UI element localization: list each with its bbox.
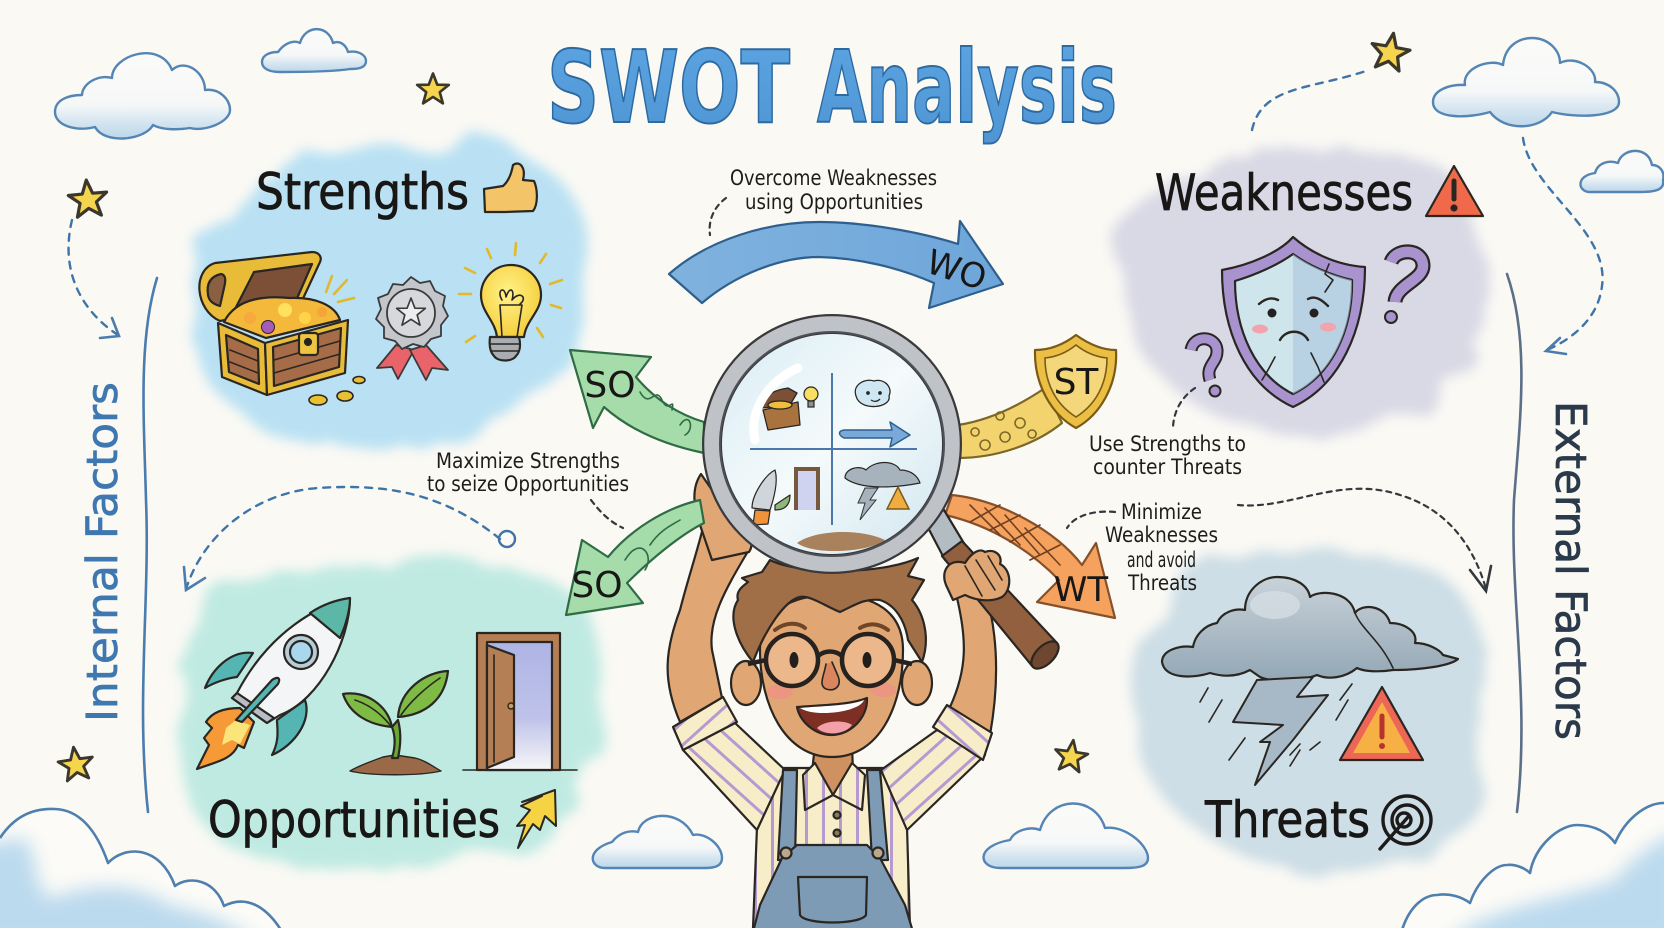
side label: internal factors: Internal Factors (78, 382, 128, 722)
cheeks (767, 683, 896, 699)
right hand gripping handle (944, 550, 1009, 600)
callout: SO: Maximize Strengths (436, 449, 620, 473)
callout: ST: Use Strengths to (1089, 432, 1246, 456)
arrow: SO lower (566, 500, 704, 615)
icon: open door (463, 633, 577, 770)
icon: storm cloud (1162, 577, 1458, 681)
icon: medal (376, 277, 448, 380)
ears (731, 661, 932, 705)
mouth (797, 698, 867, 735)
corner cloud: bottom right (1402, 803, 1664, 928)
left arm (668, 500, 747, 722)
mini icon: storm cloud (845, 462, 920, 487)
wash: strengths (187, 144, 591, 453)
callout: WO: Overcome Weaknesses (730, 166, 937, 190)
wash: weaknesses (1122, 145, 1485, 440)
panel: threats (1130, 548, 1488, 871)
dashed flow connectors (69, 70, 1603, 591)
icon: lightning bolt (1233, 677, 1328, 785)
icon: rocket (197, 598, 350, 769)
heading: threats: Threats (1204, 791, 1370, 849)
icon: cracked shield (1222, 237, 1365, 407)
face (760, 595, 903, 757)
arrow label: ST: ST (1054, 362, 1099, 403)
neck and collar (803, 745, 865, 810)
mini icon: rocket (752, 470, 790, 525)
magnifying glass (712, 324, 1063, 673)
stars (56, 30, 1412, 782)
person: head (731, 558, 932, 757)
arrow label: WO: WO (922, 242, 991, 299)
callout: WT (1067, 500, 1218, 595)
callout: SO: to seize Opportunities (427, 472, 629, 496)
left cuff (673, 697, 737, 750)
callout: ST (1089, 388, 1246, 479)
callout: WO: using Opportunities (745, 190, 923, 214)
hair (733, 558, 926, 662)
side label: external factors: External Factors (1545, 401, 1595, 740)
mini icon: chest (762, 388, 800, 430)
icon: coins (309, 376, 365, 405)
heading: strengths: Strengths (256, 163, 469, 221)
eyes (790, 652, 872, 668)
callout: WT: Weaknesses (1105, 523, 1218, 547)
mini icon: cloud face (855, 380, 890, 407)
icon: light bulb (459, 243, 562, 360)
glasses (748, 634, 912, 686)
icon: question marks (1191, 252, 1423, 396)
side label: external factors (1507, 274, 1595, 812)
title: Analysis (817, 29, 1117, 146)
metal rim (712, 324, 952, 564)
right sleeve (881, 730, 985, 830)
lens highlight (754, 368, 798, 440)
callout: ST: counter Threats (1093, 455, 1242, 479)
mini icon: blue arrow (840, 422, 910, 447)
arrow: WT (945, 495, 1115, 618)
mini icon: warning (887, 487, 909, 509)
corner cloud: bottom left (0, 809, 281, 928)
callout: SO (427, 449, 629, 528)
icon: warning triangle (1426, 166, 1483, 216)
panel: opportunities (174, 559, 603, 869)
panel: strengths (187, 144, 591, 453)
overalls (753, 770, 913, 928)
arrow: WO (669, 221, 1003, 308)
wash: threats (1130, 548, 1488, 871)
side label: internal factors (78, 278, 157, 812)
arrow label: SO upper: SO (584, 365, 636, 406)
callout: WT: Minimize (1121, 500, 1202, 524)
icon: thumbs up (484, 163, 537, 212)
left hand (694, 474, 752, 560)
right cuff (933, 705, 992, 760)
nose (822, 662, 839, 690)
icon: warning triangle (1340, 687, 1423, 760)
mini icon: door (796, 469, 818, 510)
panel: weaknesses (1122, 145, 1485, 440)
icon: sprout (343, 671, 448, 775)
rain strokes (1200, 684, 1352, 766)
arrow: ST (958, 335, 1116, 458)
brows (775, 624, 888, 630)
arrow label: WT: WT (1054, 570, 1108, 610)
arrow label: SO lower: SO (571, 565, 623, 606)
right arm (950, 590, 996, 735)
left sleeve (683, 723, 785, 830)
handle (924, 510, 1063, 673)
wash: opportunities (174, 559, 603, 869)
callout: WT: and avoid (1127, 548, 1196, 572)
title (547, 29, 1117, 146)
shield badge (1035, 335, 1116, 428)
callout: WO (710, 166, 937, 235)
heading: weaknesses: Weaknesses (1155, 164, 1413, 222)
hair seen through lens (797, 532, 885, 551)
icon: treasure chest (199, 252, 354, 395)
mini icon: bulb (804, 387, 818, 407)
lens (722, 334, 942, 554)
icon: target with pin (1380, 796, 1431, 849)
heading: opportunities: Opportunities (208, 791, 500, 849)
quadrant lines (750, 373, 917, 525)
person: arms and torso (668, 474, 996, 928)
icon: yellow arrow (517, 790, 556, 848)
callout: WT: Threats (1127, 571, 1197, 595)
title: SWOT (547, 29, 790, 146)
arrow: SO upper (570, 350, 704, 453)
shirt torso (753, 768, 910, 928)
